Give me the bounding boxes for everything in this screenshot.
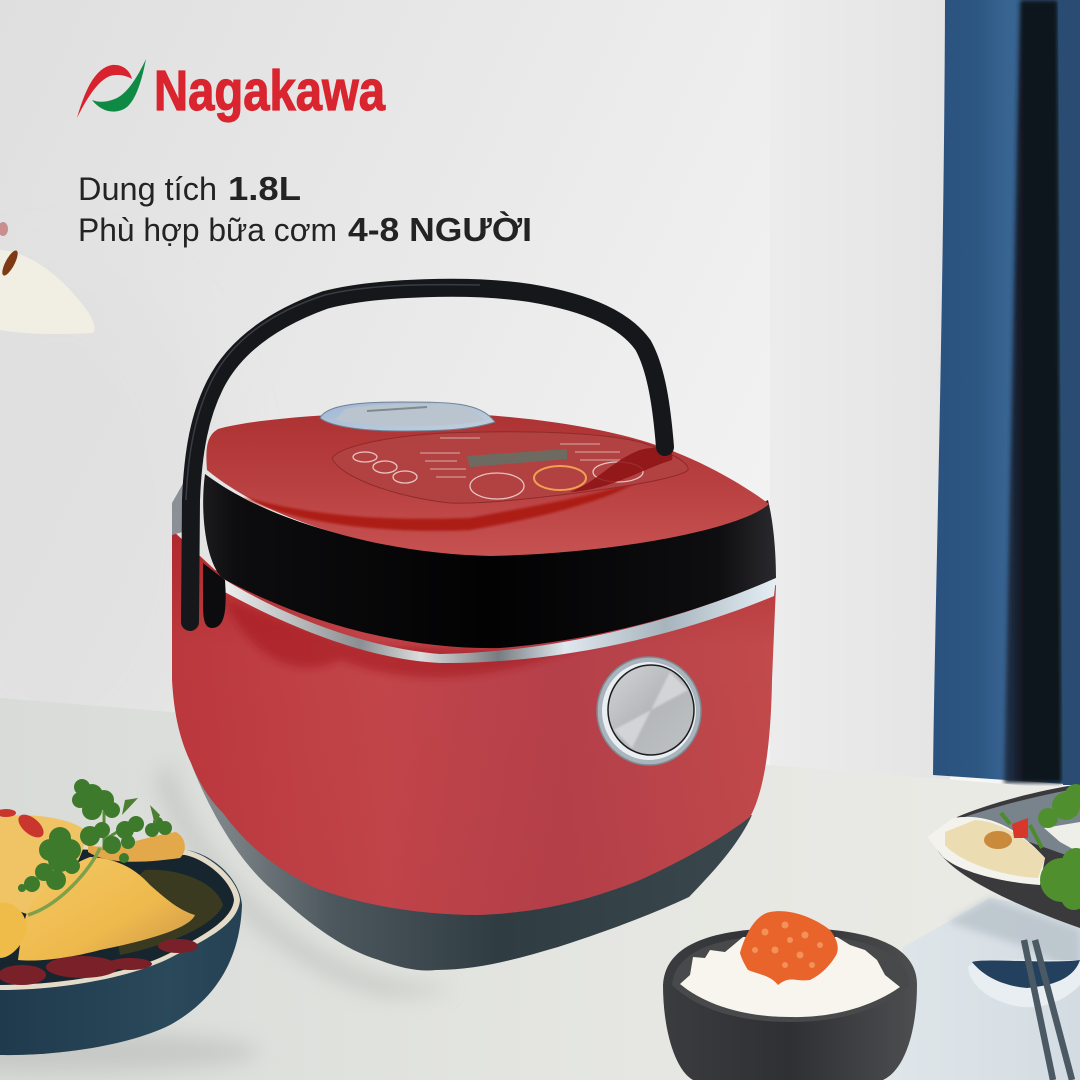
steam cap — [320, 402, 495, 431]
plate — [935, 784, 1080, 928]
capacity value: 1.8L — [228, 170, 301, 207]
dish body — [0, 845, 242, 1055]
dish interior — [0, 845, 234, 985]
capacity text block — [78, 170, 532, 248]
cilantro garnish — [18, 779, 172, 915]
servings label: Phù hợp bữa cơm — [78, 212, 337, 248]
cooker red body — [172, 530, 776, 915]
panel face — [332, 432, 688, 503]
rice bowl — [663, 911, 917, 1080]
chopsticks — [1024, 940, 1072, 1080]
blue napkin — [890, 898, 1080, 1080]
rice cooker — [155, 285, 776, 996]
LCD display — [467, 449, 567, 467]
dish rim — [0, 840, 240, 990]
cooker dark base — [191, 763, 752, 971]
chicken — [0, 815, 195, 961]
control panel — [332, 432, 688, 503]
chicken main breast — [18, 857, 195, 961]
body reflection — [225, 600, 600, 677]
chicken left breast — [0, 815, 86, 915]
handle shadow on panel — [570, 448, 672, 492]
salmon roe — [740, 911, 838, 985]
bowl body — [663, 928, 917, 1080]
left lid piece behind handle — [172, 480, 190, 535]
red lid top — [206, 412, 769, 556]
broth — [110, 870, 223, 955]
stainless dial — [597, 657, 701, 765]
black lid band — [203, 474, 776, 648]
scallop shell — [927, 817, 1045, 885]
logo swoosh icon — [77, 59, 146, 118]
chicken wing — [88, 832, 185, 862]
chrome trim strip — [221, 578, 776, 663]
lid red reflection — [243, 480, 640, 531]
second shell — [1044, 822, 1080, 853]
broccoli — [1038, 784, 1080, 910]
carrying handle — [186, 285, 665, 628]
cooker table shadow — [155, 760, 449, 996]
goji berries — [0, 809, 48, 842]
chicken chunk — [0, 903, 27, 958]
capacity label: Dung tích — [78, 171, 217, 207]
brand logo — [77, 59, 386, 123]
handle highlight — [186, 285, 480, 500]
handle arc — [190, 288, 665, 622]
logo wordmark: Nagakawa — [154, 59, 386, 123]
background wall — [0, 0, 1080, 800]
scallop flesh — [945, 820, 1045, 878]
dish shadow — [0, 1032, 260, 1072]
left dish with chicken — [0, 779, 260, 1072]
plate surface — [962, 788, 1080, 860]
small label lines — [420, 438, 620, 477]
blue curtain — [933, 0, 1080, 785]
right plate with scallops — [927, 784, 1080, 928]
flower petal decoration — [0, 222, 94, 334]
handle foot — [203, 563, 226, 628]
shell topping — [984, 813, 1042, 849]
rice — [680, 937, 900, 1017]
table surface — [0, 698, 1080, 1080]
red dates — [0, 939, 198, 985]
panel buttons — [353, 452, 643, 499]
chopstick rest — [968, 960, 1080, 1007]
bowl inner rim — [672, 935, 910, 1022]
servings value: 4-8 NGƯỜI — [348, 211, 532, 248]
